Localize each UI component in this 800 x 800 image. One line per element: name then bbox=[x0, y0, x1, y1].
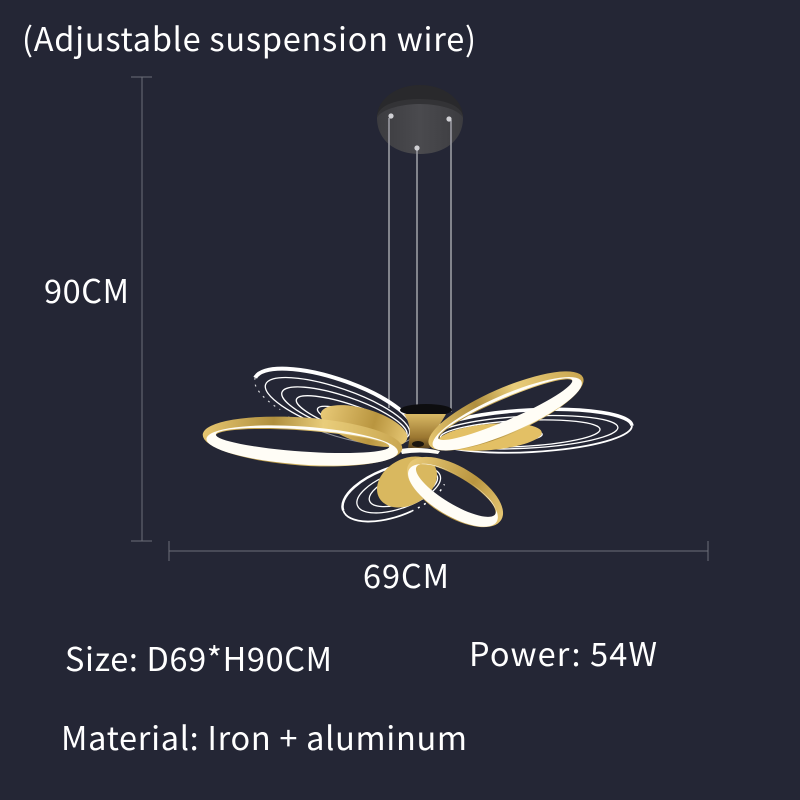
gold disc: upper left bbox=[316, 397, 412, 455]
size spec: Size: D69*H90CM bbox=[65, 634, 332, 681]
gold ring: lower right bbox=[396, 443, 514, 541]
width dimension line bbox=[169, 541, 708, 561]
power spec: Power: 54W bbox=[469, 629, 657, 676]
central hub bbox=[400, 404, 452, 454]
gold ring: left bbox=[201, 411, 404, 472]
title: (Adjustable suspension wire) bbox=[22, 14, 476, 61]
material spec: Material: Iron + aluminum bbox=[61, 713, 467, 760]
gold ring: upper right bbox=[420, 356, 592, 466]
canopy screws bbox=[388, 113, 452, 151]
gold disc: lower bbox=[368, 446, 446, 518]
height label: 90CM bbox=[44, 266, 129, 313]
height dimension line bbox=[131, 77, 152, 541]
chandelier illustration bbox=[201, 85, 633, 541]
acrylic disc: lower bbox=[335, 452, 449, 533]
ceiling canopy bbox=[377, 85, 463, 154]
suspension wires bbox=[389, 118, 451, 412]
acrylic disc: right bbox=[427, 405, 633, 457]
acrylic disc: upper left bbox=[246, 353, 423, 460]
width label: 69CM bbox=[363, 551, 449, 598]
gold disc: right bbox=[437, 420, 543, 454]
